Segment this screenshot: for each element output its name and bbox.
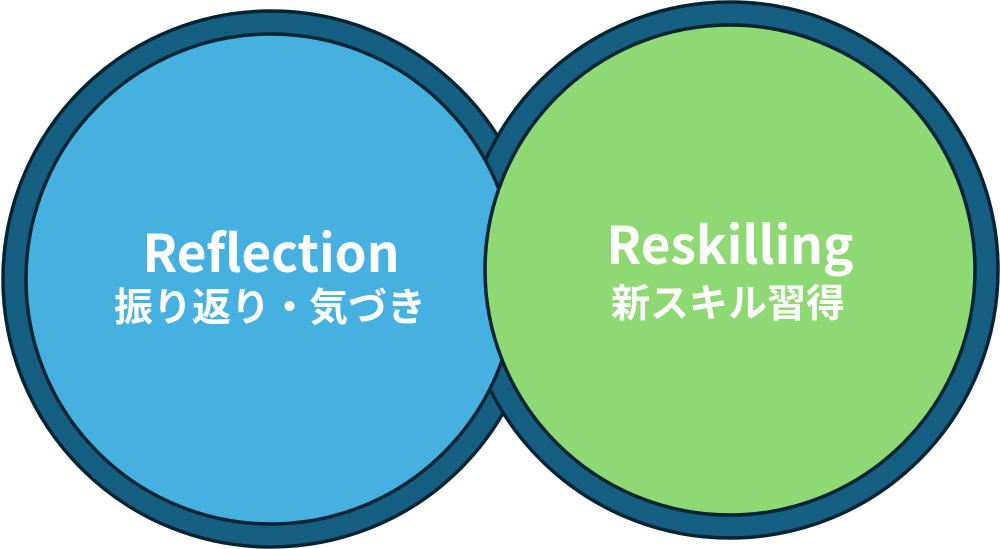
label: Reskilling xyxy=(606,204,854,329)
subheading: reflection and awareness: 振り返り・気づき xyxy=(114,277,426,333)
label: Reflection xyxy=(114,212,426,333)
left circle outer ring xyxy=(3,11,539,547)
heading: Reflection: Reflection xyxy=(142,212,400,287)
heading: Reskilling: Reskilling xyxy=(606,204,854,279)
subheading: learning new skills: 新スキル習得 xyxy=(611,273,845,329)
right circle inner disc xyxy=(485,25,975,515)
left circle inner disc xyxy=(26,34,516,524)
right circle outer ring xyxy=(462,2,998,538)
